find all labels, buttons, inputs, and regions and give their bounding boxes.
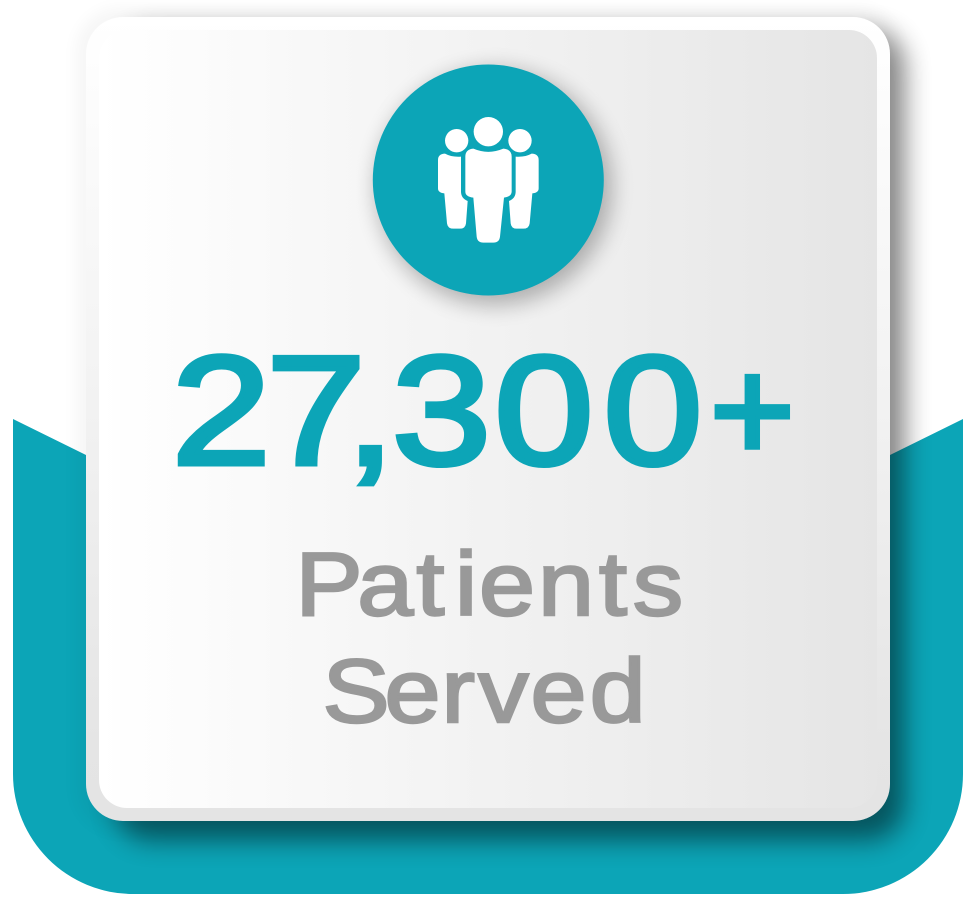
plus sign: + [710, 329, 795, 491]
teal folder backing [13, 419, 963, 894]
card outer frame [86, 17, 890, 821]
card faint halo [76, 8, 900, 832]
digits: 27,300 [172, 325, 703, 497]
card inner panel [99, 30, 877, 808]
badge circle [373, 64, 604, 296]
label line 1: Patients [295, 535, 683, 635]
label: Patients Served [295, 535, 683, 742]
label line 2: Served [323, 642, 646, 742]
icon badge: three people [373, 64, 612, 305]
headline number [172, 325, 795, 497]
icon: people group [438, 117, 539, 243]
card drop shadow [115, 30, 905, 841]
card [86, 17, 890, 821]
badge shadow [376, 69, 612, 305]
